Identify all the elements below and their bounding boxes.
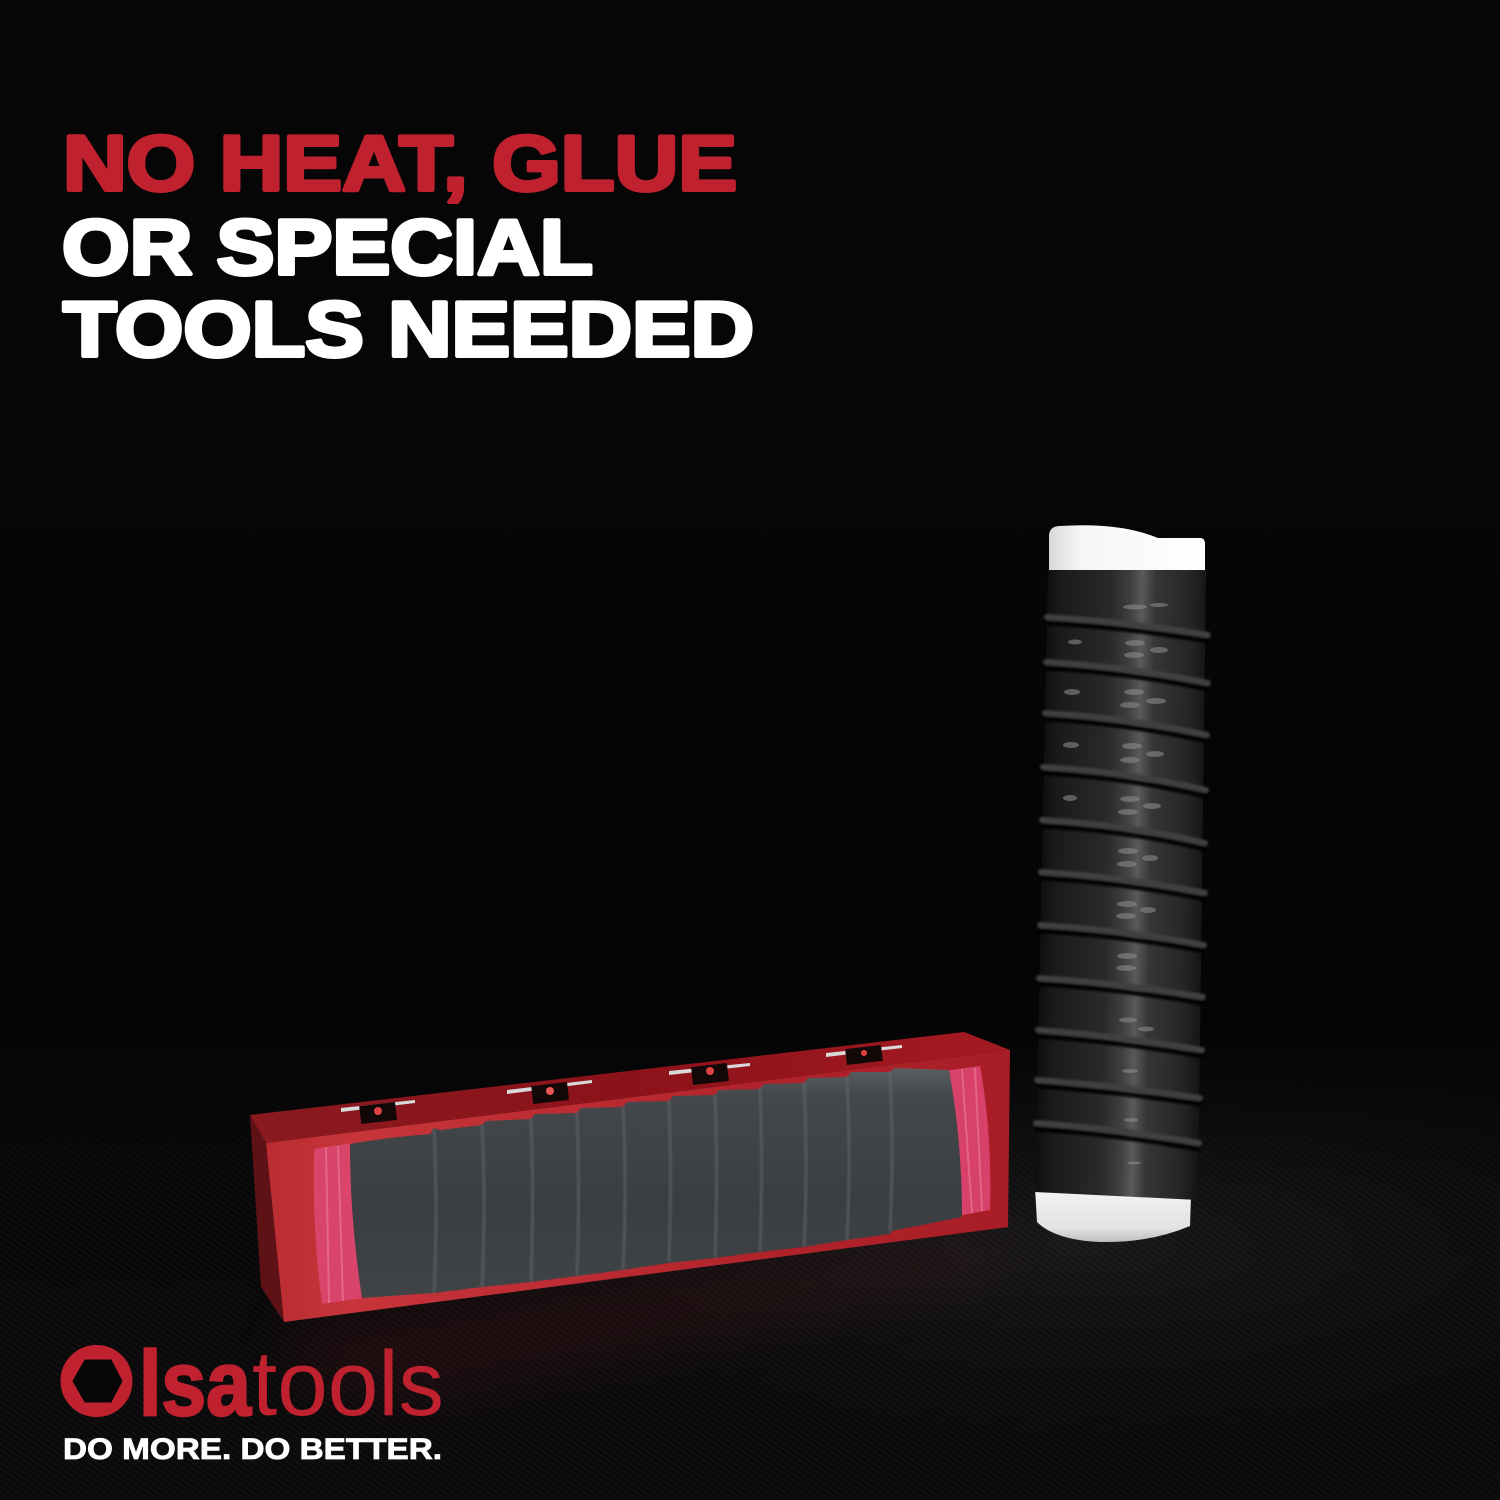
headline: NO HEAT, GLUE (63, 119, 737, 207)
white top cap (1049, 525, 1205, 573)
headline (62, 119, 754, 373)
headline: TOOLS NEEDED (63, 285, 754, 373)
tube ridges in window (434, 1071, 892, 1293)
white base ring (1035, 1188, 1191, 1242)
box window pink ends (314, 1143, 364, 1304)
red product box lying on its side (250, 1032, 1010, 1322)
logo wordmark: tools (252, 1333, 444, 1435)
box top labels (341, 1045, 902, 1124)
logo tagline: DO MORE. DO BETTER. (63, 1433, 442, 1466)
standing black tube (1030, 525, 1210, 1242)
logo wordmark: lsa (139, 1333, 252, 1435)
box left end (250, 1115, 284, 1322)
gray tube in window (350, 1068, 962, 1298)
tube spiral ridges (1036, 617, 1208, 1149)
headline: OR SPECIAL (62, 203, 593, 291)
box top face (250, 1032, 1010, 1143)
tube dimples (1063, 603, 1168, 1164)
logo wordmark: O (65, 1328, 128, 1435)
logo wordmark (65, 1328, 444, 1435)
Olsatools logo (63, 1328, 444, 1466)
tube body (1030, 570, 1210, 1202)
dark photo background (0, 1097, 1500, 1500)
box front face (266, 1050, 1010, 1322)
